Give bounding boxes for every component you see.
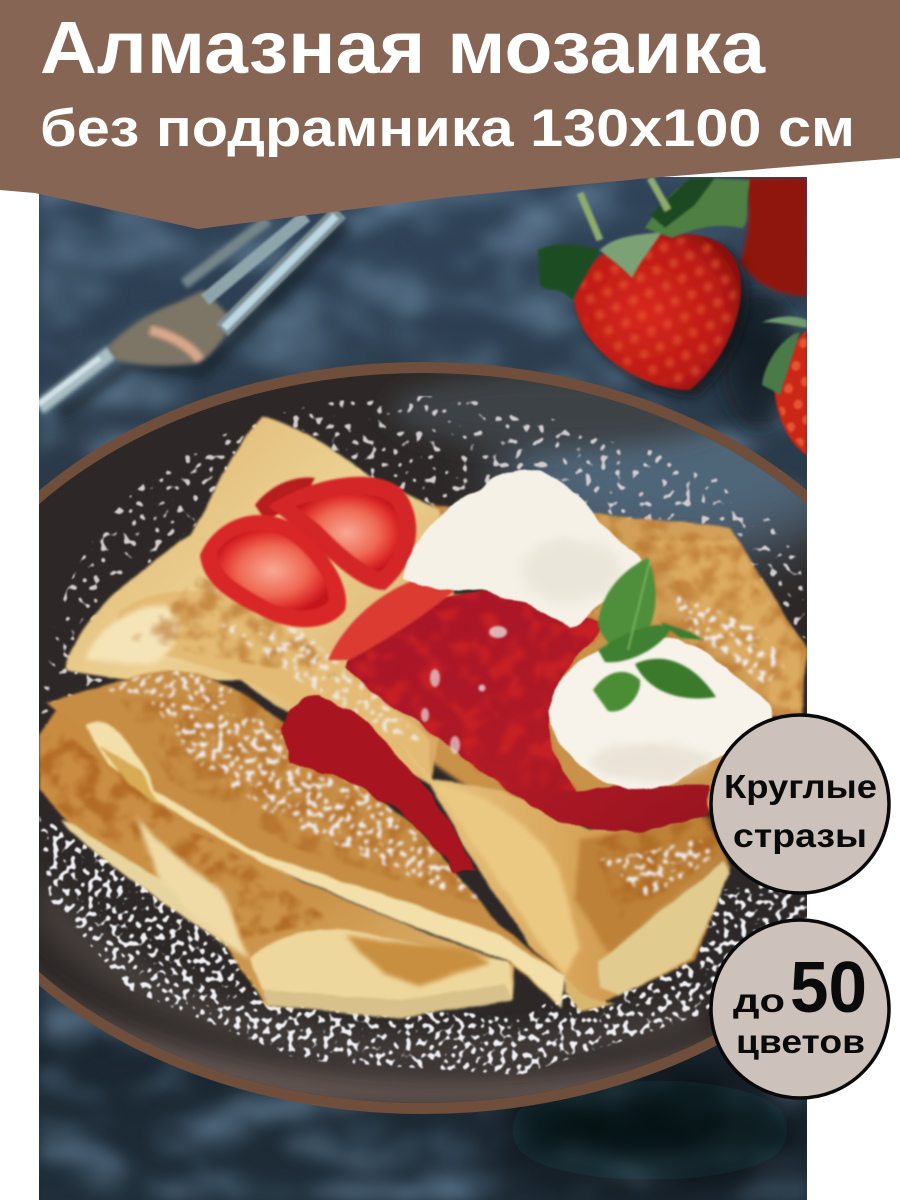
badge: round rhinestones: [711, 715, 889, 893]
badge: up to 50 colours: [711, 920, 889, 1098]
crepe base under jam: [400, 590, 775, 810]
back crepe flap: [65, 416, 460, 785]
jam sugar highlights: [421, 626, 507, 754]
table background: [39, 177, 807, 1200]
icon: fork: [39, 212, 345, 415]
badge: up to 50 colours: до: [733, 982, 785, 1019]
strawberry jam: [282, 592, 708, 872]
bottom folded crepe: [39, 705, 515, 1018]
title: Алмазная мозаика: [40, 6, 766, 89]
strawberry leaves and stems: [538, 178, 807, 395]
badge: round rhinestones: стразы: [733, 817, 867, 854]
badge: up to 50 colours: 50: [790, 948, 867, 1028]
header banner: [0, 0, 900, 229]
icon: mint leaves: [593, 558, 716, 712]
photo: crepes with strawberries on a plate: [39, 177, 807, 1200]
plate: [39, 362, 807, 1114]
badge: up to 50 colours: цветов: [736, 1023, 865, 1060]
icon: whole strawberries: [538, 178, 807, 455]
powdered sugar on plate: [39, 396, 807, 1075]
badge: round rhinestones: Круглые: [724, 768, 877, 805]
whipped cream: [403, 469, 772, 789]
right crepe corner: [430, 505, 807, 715]
front right crepe fold: [400, 740, 730, 1010]
subtitle: без подрамника 130х100 см: [40, 99, 855, 158]
strawberry slices: [200, 477, 455, 660]
top folded crepe: [46, 668, 565, 1008]
